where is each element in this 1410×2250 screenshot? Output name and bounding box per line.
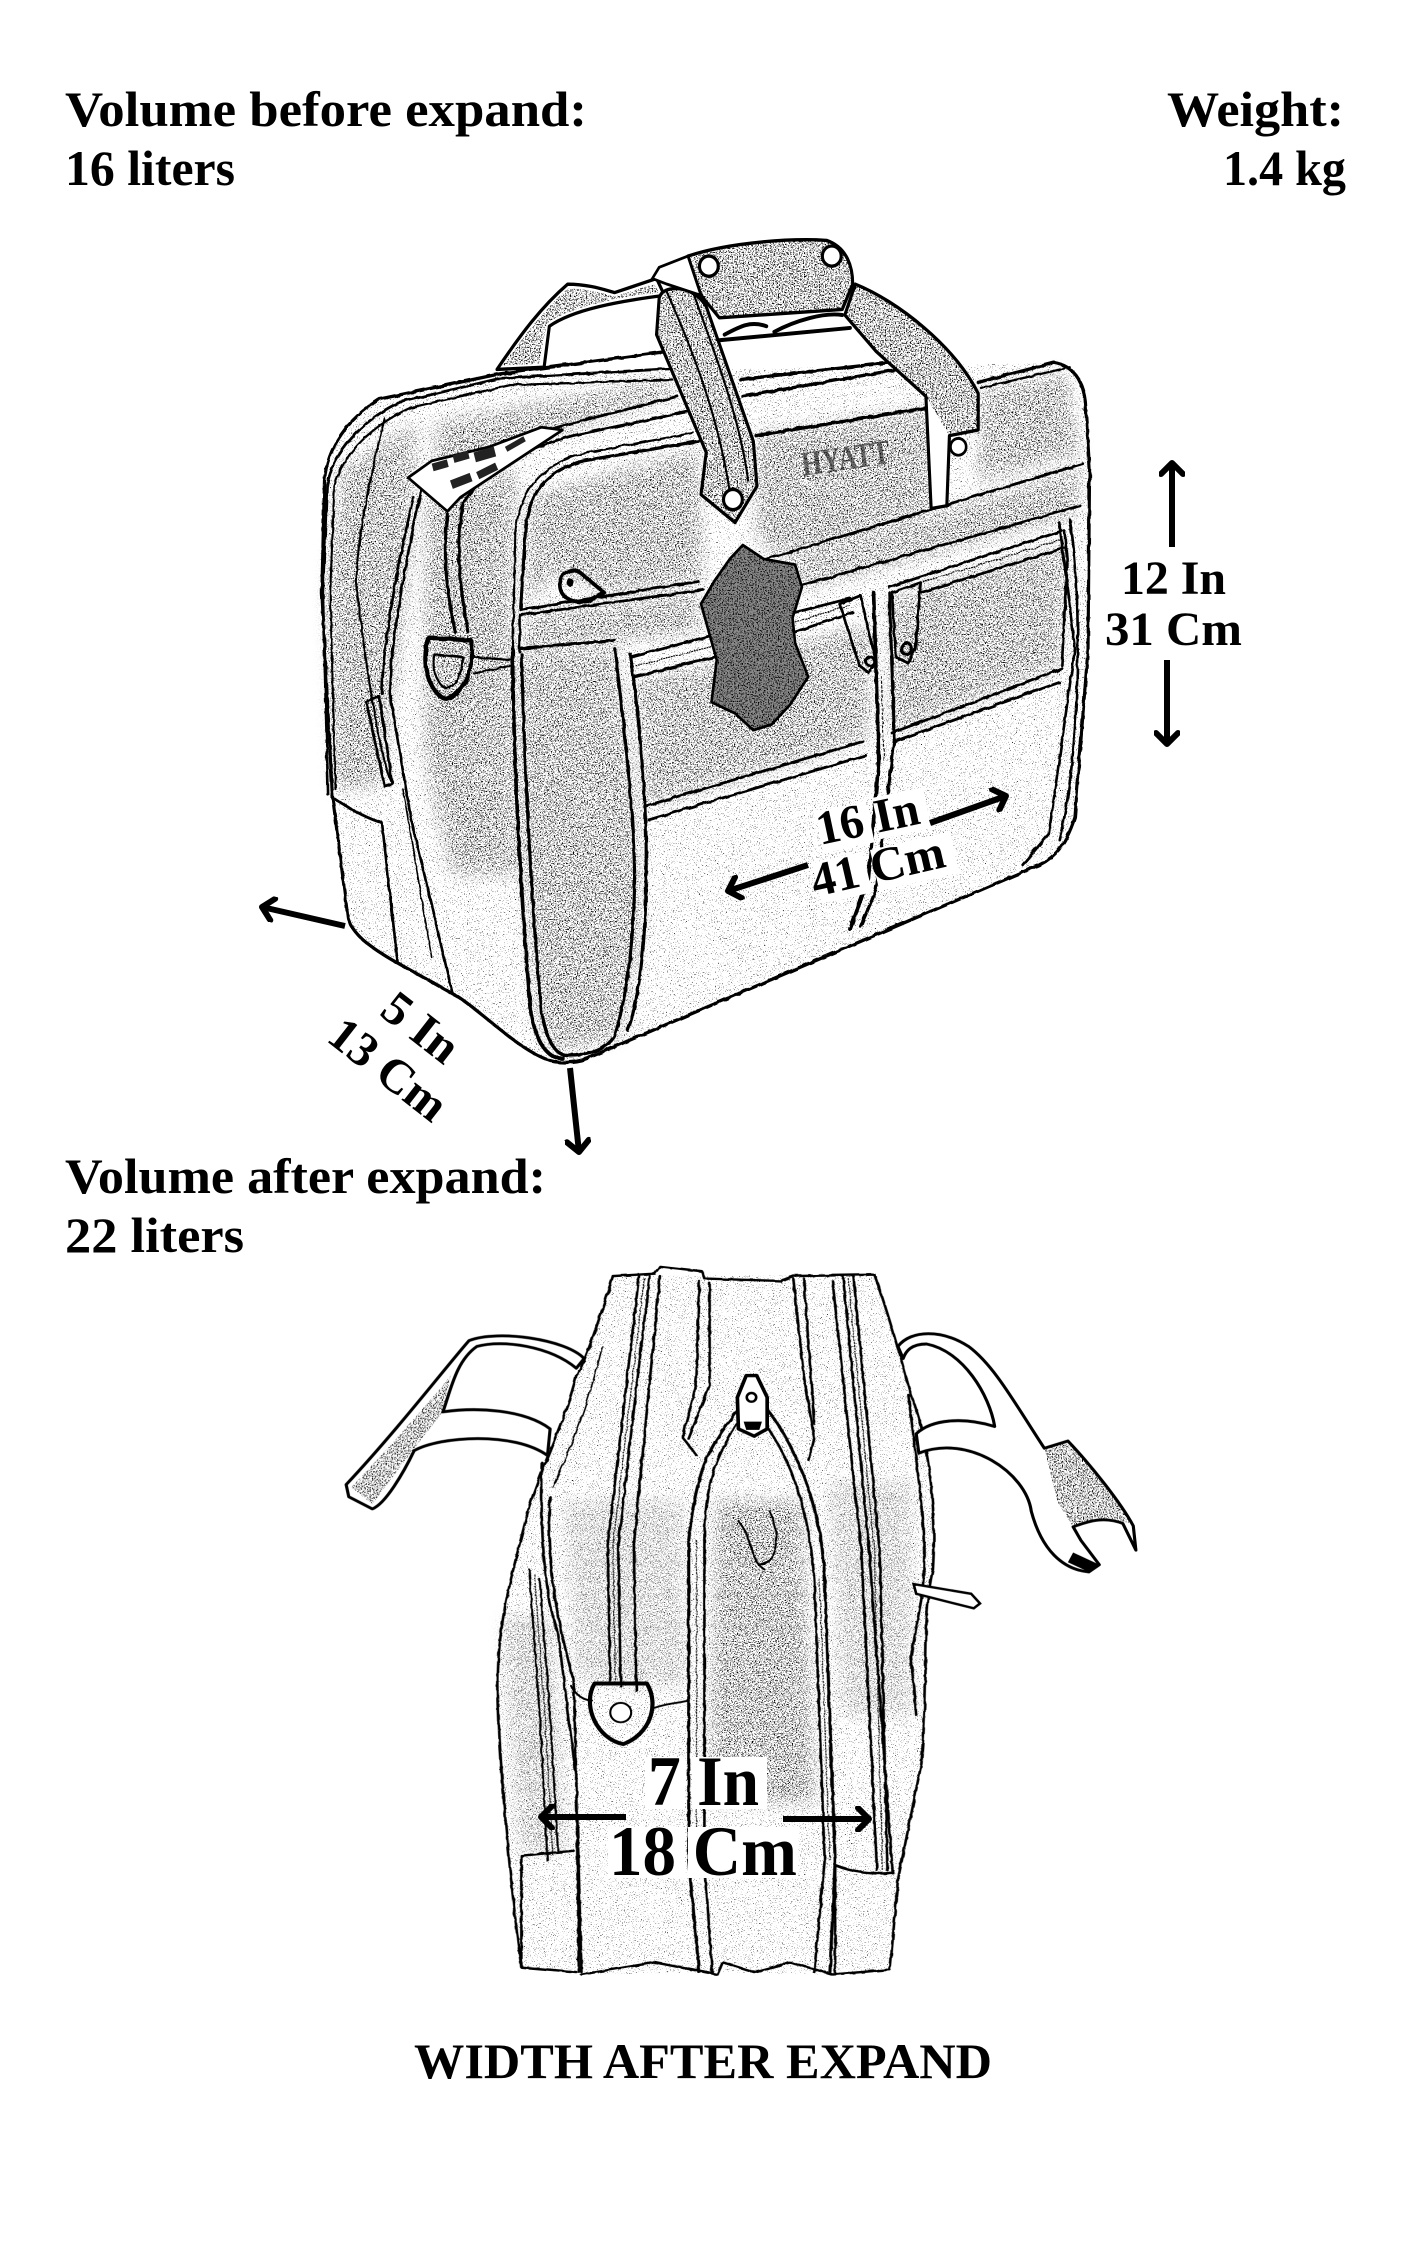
zipper pull: centre xyxy=(737,1376,767,1436)
handle right xyxy=(898,1334,1136,1572)
main zipper on front edge xyxy=(445,514,455,632)
arrow: length left xyxy=(728,865,808,891)
caption: width after expand: WIDTH AFTER EXPAND xyxy=(414,2033,992,2089)
label: length background xyxy=(812,787,959,904)
debossed logo: HYATT xyxy=(799,433,892,484)
label: width background xyxy=(608,1757,798,1878)
leather grain: darker panels xyxy=(327,374,1080,1053)
leather grain: darker areas xyxy=(503,1482,911,1851)
combination lock xyxy=(408,427,562,511)
label: height 12 In 31 Cm xyxy=(1105,552,1242,656)
handle left xyxy=(346,1336,584,1509)
illustration: bag front three-quarter view xyxy=(322,240,1090,1062)
leather grain: base xyxy=(322,363,1090,1062)
label: length 16 In 41 Cm xyxy=(806,782,950,908)
pocket zip left xyxy=(631,598,853,677)
centre gusset xyxy=(683,1281,699,1456)
outer left zipper xyxy=(529,1570,558,1860)
front flap border xyxy=(521,441,698,610)
right zippers xyxy=(833,1276,893,1873)
centre details xyxy=(738,1511,777,1570)
D ring xyxy=(571,1683,689,1744)
label: length 16 In 41 Cm: 16 In xyxy=(811,782,924,856)
label: width 7 In 18 Cm: 18 Cm xyxy=(609,1813,797,1891)
text: volume after expand: 22 liters xyxy=(65,1207,244,1263)
text: volume after expand: Volume after expand: xyxy=(65,1148,546,1204)
carry handle: front strap xyxy=(652,240,978,523)
text: weight: 1.4 kg xyxy=(1223,140,1346,196)
arrow: width right xyxy=(783,1816,869,1822)
text: volume after expand xyxy=(65,1148,546,1263)
text: volume before expand: Volume before expand: xyxy=(65,81,587,137)
text: volume before expand: 16 liters xyxy=(65,140,235,196)
arrow: height up xyxy=(1169,463,1175,547)
arrow: width left xyxy=(541,1814,626,1820)
centre zipper xyxy=(689,1409,738,1972)
leather tag xyxy=(701,545,808,730)
lower pockets xyxy=(646,741,866,820)
illustration: expanded bag side view xyxy=(346,1266,1136,1974)
arrow: depth down xyxy=(570,1068,579,1152)
arrow: height down xyxy=(1164,660,1170,744)
bag line work xyxy=(498,1266,934,1974)
pocket zip right xyxy=(889,531,1067,666)
D ring on side xyxy=(425,638,472,699)
label: length 16 In 41 Cm: 41 Cm xyxy=(806,825,950,908)
centre gusset xyxy=(850,593,879,929)
arrow: length right xyxy=(930,796,1006,823)
inner left zipper xyxy=(608,1276,660,1691)
arrow: depth left xyxy=(262,907,345,926)
label: width 7 In 18 Cm: 7 In xyxy=(648,1743,759,1821)
label: height 12 In 31 Cm: 31 Cm xyxy=(1105,603,1242,656)
left vertical seam panel xyxy=(513,649,562,1058)
label: depth 5 In 13 Cm: 5 In xyxy=(371,981,470,1074)
side zip lines xyxy=(323,368,677,795)
zipper pulls xyxy=(840,596,876,672)
side zip pull xyxy=(366,696,392,786)
carry handle: rear xyxy=(497,279,664,369)
text: weight: Weight: xyxy=(1167,81,1344,137)
zipper pull: right xyxy=(914,1584,980,1608)
text: volume before expand xyxy=(65,81,587,196)
label: width 7 In 18 Cm xyxy=(609,1743,797,1891)
text: weight xyxy=(1167,81,1346,196)
bag body silhouette xyxy=(322,363,1090,1062)
label: height 12 In 31 Cm: 12 In xyxy=(1121,552,1226,605)
flap button xyxy=(560,570,604,602)
leather grain: base xyxy=(498,1275,934,1974)
label: depth 5 In 13 Cm: 13 Cm xyxy=(318,1007,458,1132)
bottom side patch xyxy=(332,797,398,963)
bag line work xyxy=(322,351,1090,1062)
